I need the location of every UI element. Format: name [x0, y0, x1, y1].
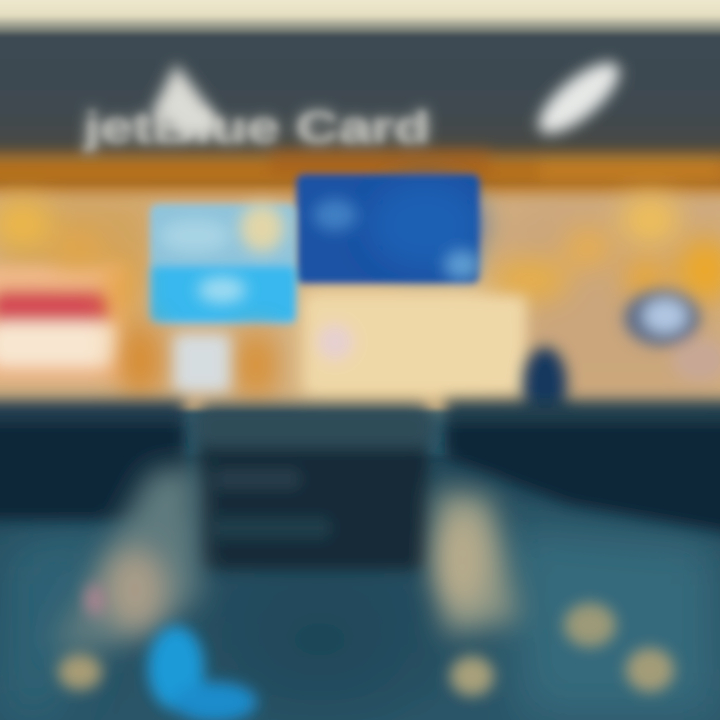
- reflections: floor highlights: [50, 465, 674, 696]
- panel: floor: [0, 455, 720, 720]
- panel: back wall: [0, 185, 720, 410]
- reflection: blue card on floor: [148, 626, 257, 720]
- sign: pale poster: [306, 296, 526, 394]
- sign: round blue display right: [624, 290, 720, 382]
- panel: ceiling strip: [0, 0, 720, 36]
- panel: dark storefront fascia: [0, 34, 720, 156]
- sign: red and white panel: [0, 265, 125, 380]
- panel: central desk: [194, 404, 434, 570]
- logo: blurred brand wordmark: jetBlue Card: [83, 103, 430, 152]
- panel: left counter: [0, 400, 185, 520]
- panel: right counter: [445, 400, 720, 535]
- icon: white tail logo: [528, 51, 630, 145]
- figure: person silhouette: [523, 347, 569, 470]
- sign: dark blue card: [296, 174, 480, 284]
- logo: blurred brand wordmark: [83, 64, 430, 152]
- logo: blurred brand wordmark: jetBlue Card: [83, 103, 430, 152]
- sign: light blue card: [150, 204, 296, 324]
- lights: warm glow spots: [0, 196, 720, 399]
- sign: small white stand: [174, 334, 230, 392]
- panel: floor tone patches: [0, 520, 720, 720]
- panel: orange header band: [0, 150, 720, 192]
